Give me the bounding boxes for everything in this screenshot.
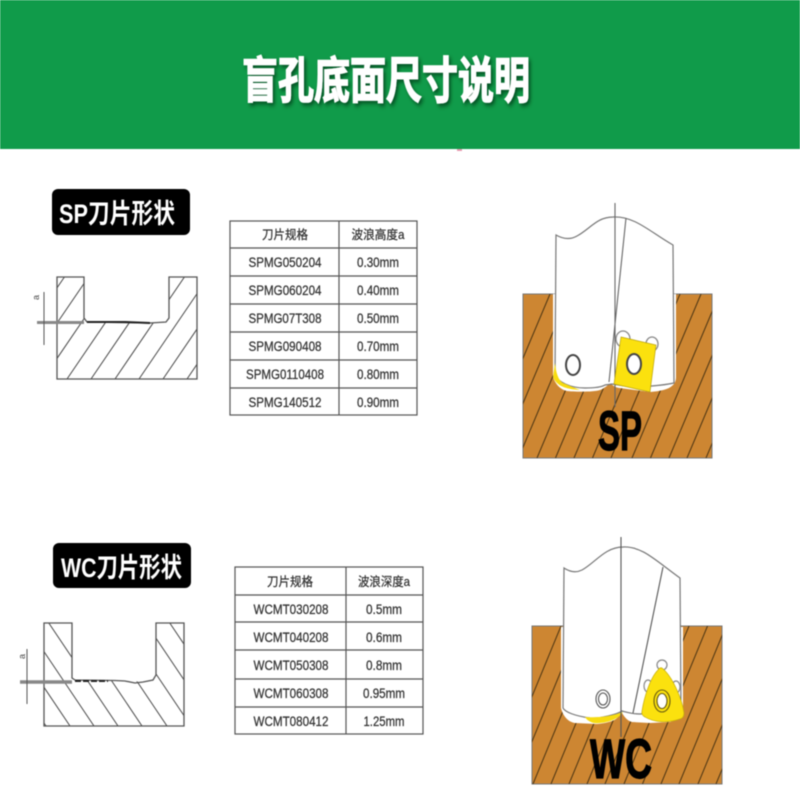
table: SP insert specs: 0.50mm: [357, 311, 399, 326]
pocket: [561, 627, 683, 724]
illustration: SP tool in workpiece: [522, 202, 714, 460]
table: WC insert specs: 0.6mm: [366, 630, 402, 645]
WC mark: WC: [590, 727, 652, 790]
label: WC insert shape: [53, 543, 191, 588]
table: WC insert specs: WCMT080412: [254, 714, 328, 729]
table: WC insert specs: WCMT030208: [254, 602, 328, 617]
diagram: WC blind hole section: [19, 622, 186, 728]
table: WC insert specs: 0.95mm: [363, 686, 405, 701]
table: SP insert specs: 0.90mm: [357, 395, 399, 410]
table: WC insert specs: 刀片规格: [267, 574, 313, 589]
center and slant lines: [609, 203, 626, 407]
label: SP insert shape: SP刀片形状: [59, 199, 175, 229]
SP mark: SP: [598, 399, 642, 462]
clamp bumps: [657, 660, 667, 670]
table: SP insert specs: [230, 221, 417, 415]
pocket: [553, 294, 676, 392]
body hole: [566, 355, 580, 375]
trigon insert: [642, 668, 684, 722]
clamp bumps: [616, 331, 630, 347]
illustration: WC tool in workpiece: [530, 536, 724, 786]
dimension label a: a: [17, 654, 27, 659]
title: 盲孔底面尺寸说明: [242, 54, 530, 109]
header banner: [0, 0, 800, 151]
table: WC insert specs: WCMT060308: [254, 686, 328, 701]
table: SP insert specs: 刀片规格: [262, 227, 308, 242]
square insert: [614, 337, 656, 392]
dimension label a: a: [31, 295, 41, 300]
center and slant lines: [621, 537, 663, 737]
table: WC insert specs: 1.25mm: [364, 714, 404, 729]
insert screw: [627, 354, 641, 374]
tool body: [555, 217, 674, 388]
body hole: [596, 690, 610, 708]
tool body: [563, 547, 681, 718]
table: WC insert specs: 0.8mm: [366, 658, 402, 673]
label: SP insert shape: [52, 189, 190, 235]
left insert: [553, 363, 580, 390]
table: WC insert specs: 0.5mm: [366, 602, 402, 617]
table: SP insert specs: 0.80mm: [357, 367, 399, 382]
table: WC insert specs: 波浪深度a: [358, 574, 410, 589]
table: SP insert specs: SPMG0110408: [246, 367, 324, 382]
table: WC insert specs: WCMT050308: [254, 658, 328, 673]
label: WC insert shape: WC刀片形状: [61, 553, 182, 583]
bottom insert: [585, 712, 623, 723]
table: SP insert specs: SPMG090408: [248, 339, 322, 354]
table: SP insert specs: 0.40mm: [357, 283, 399, 298]
table: SP insert specs: 0.30mm: [357, 255, 399, 270]
table: SP insert specs: 波浪高度a: [352, 227, 405, 242]
table: SP insert specs: 0.70mm: [357, 339, 399, 354]
table: WC insert specs: WCMT040208: [254, 630, 328, 645]
diagram: SP blind hole section: [33, 276, 198, 380]
table: SP insert specs: SPMG140512: [248, 395, 322, 410]
table: SP insert specs: SPMG07T308: [248, 311, 322, 326]
table: WC insert specs: [235, 567, 423, 734]
table: SP insert specs: SPMG050204: [248, 255, 322, 270]
table: SP insert specs: SPMG060204: [248, 283, 322, 298]
insert screw: [654, 690, 670, 712]
